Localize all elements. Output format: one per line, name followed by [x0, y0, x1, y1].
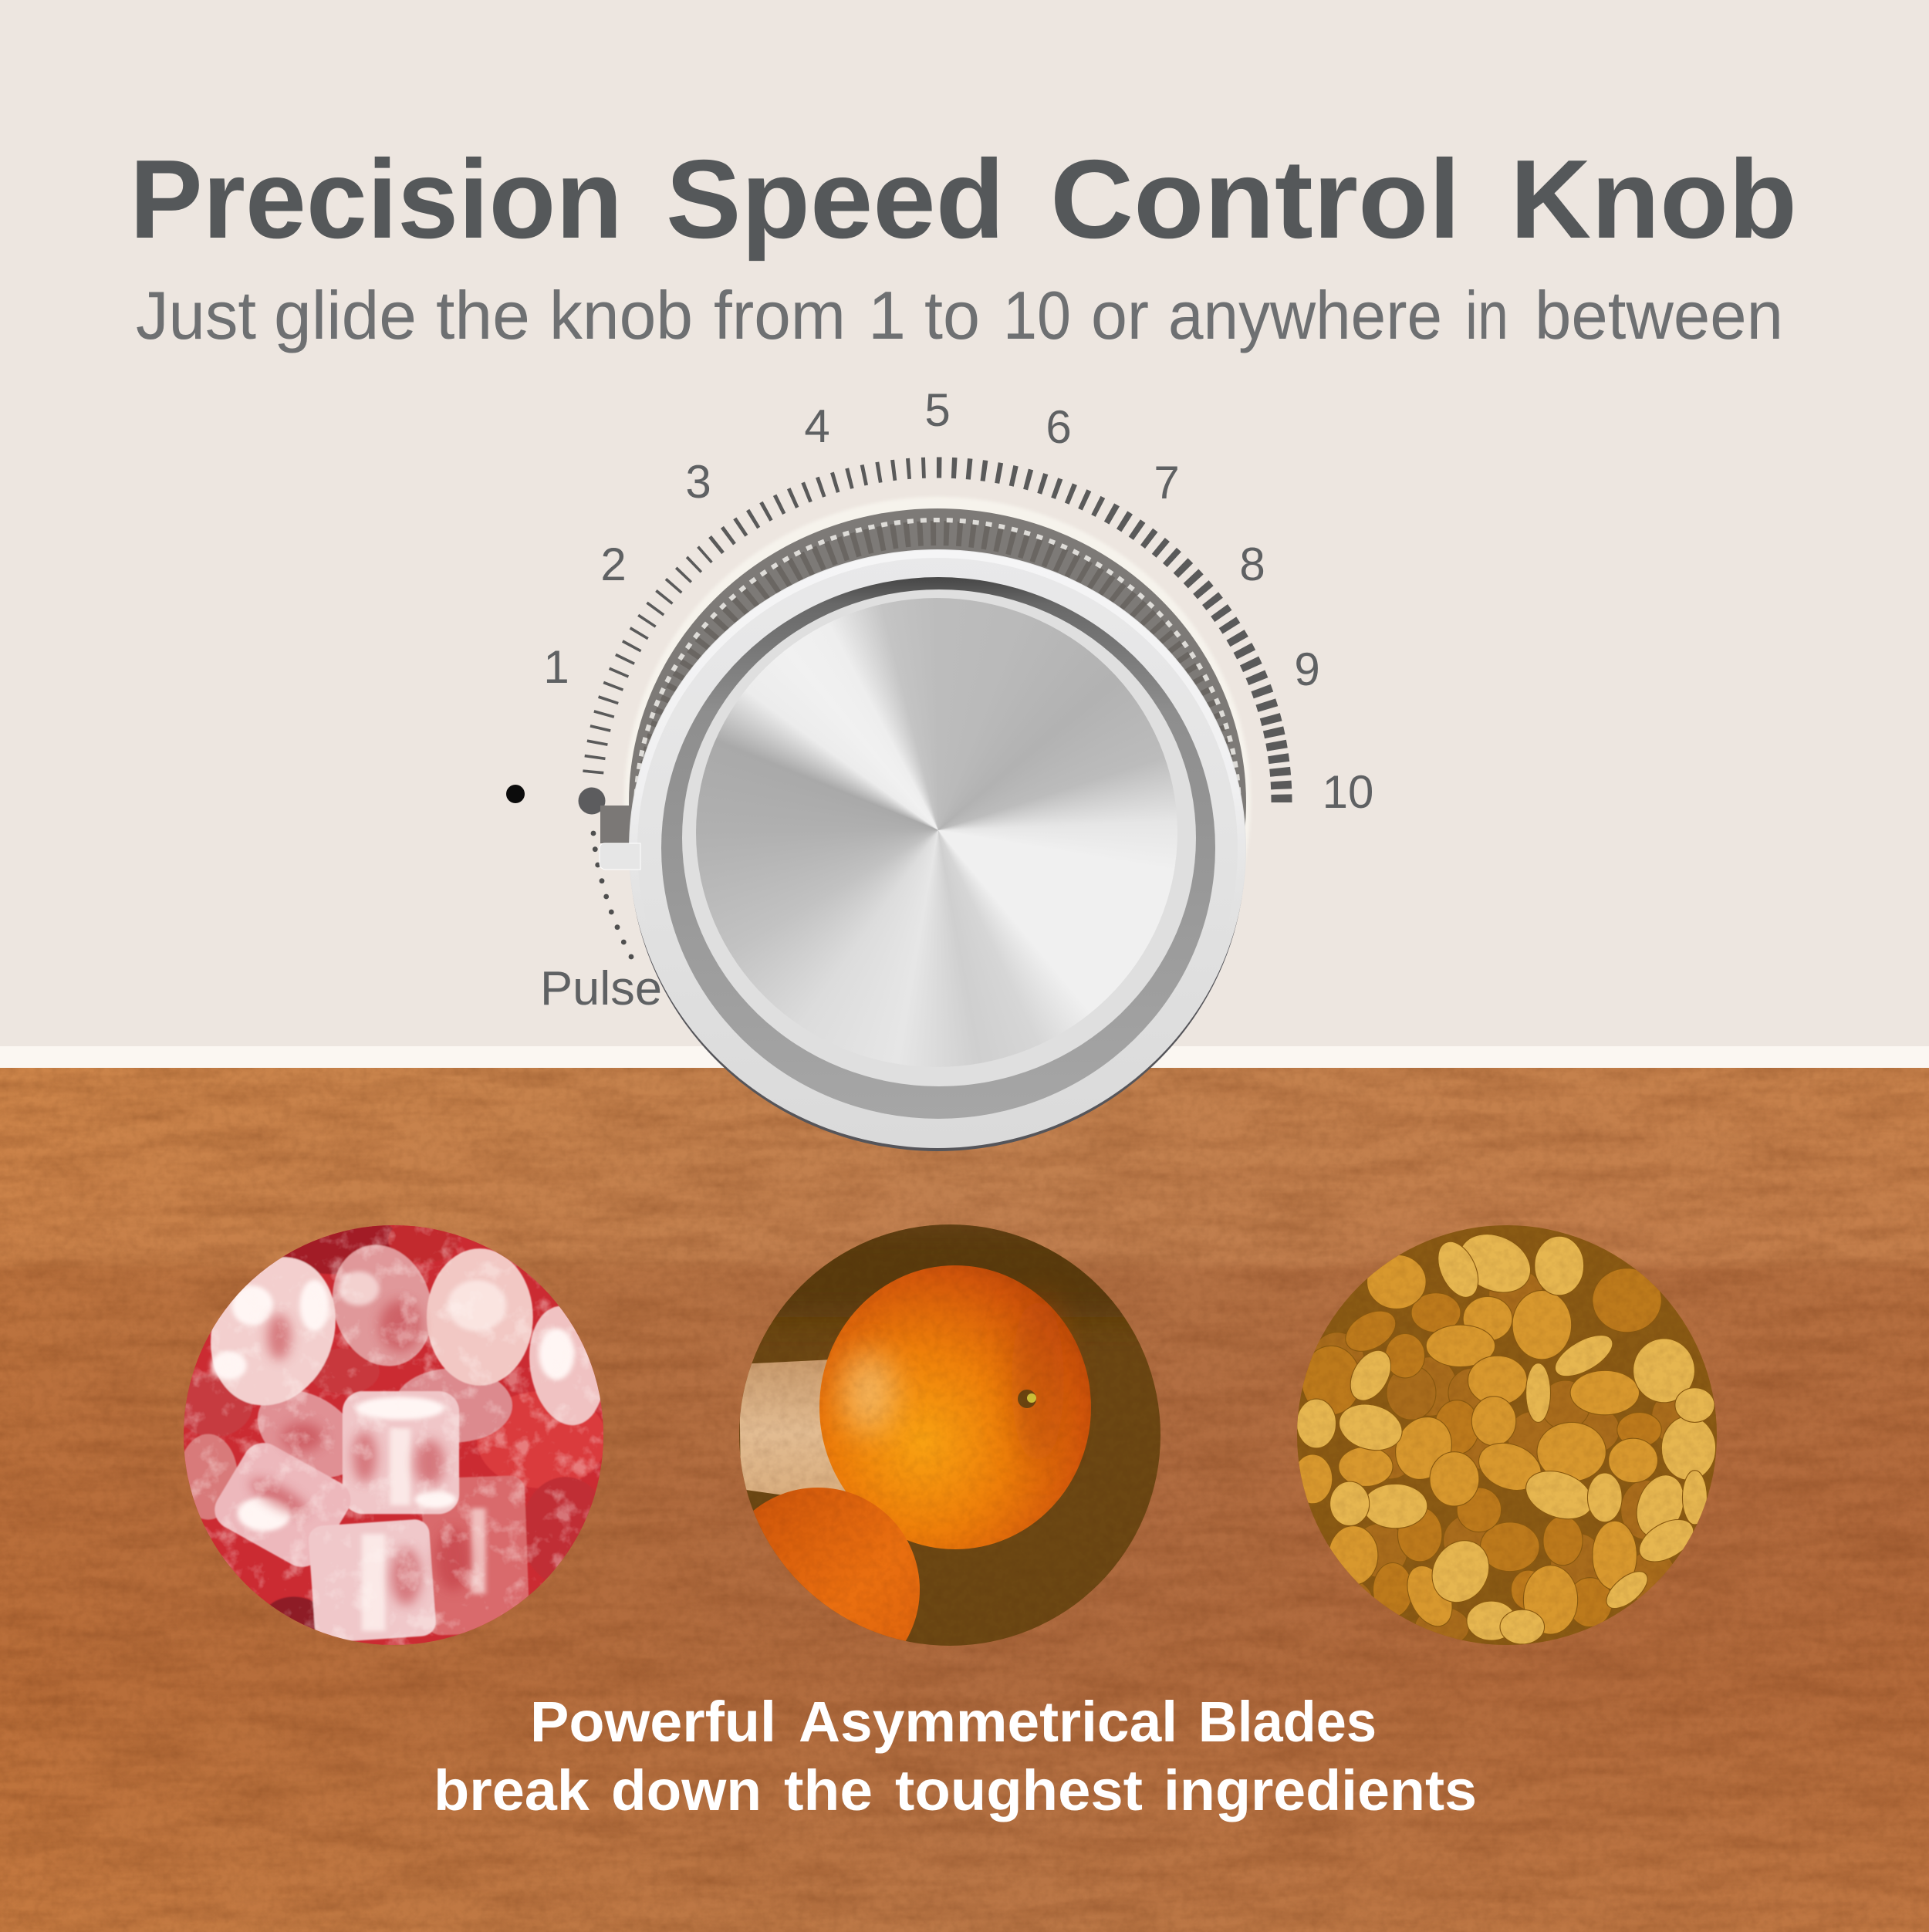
speed dial numbers — [543, 384, 1373, 818]
speed dial numbers: 2 — [600, 539, 627, 590]
rim bottom shadow — [630, 554, 1245, 1151]
pointer tab — [600, 843, 640, 870]
second orange — [753, 1488, 920, 1641]
title: Control — [1050, 137, 1461, 262]
title: Knob — [1510, 137, 1797, 262]
off position black dot — [506, 785, 525, 803]
stem — [1018, 1390, 1036, 1408]
speed dial numbers: 3 — [685, 456, 711, 508]
subtitle — [136, 277, 1783, 353]
speed dial numbers: 6 — [1046, 401, 1072, 453]
caption line 1: Blades — [1198, 1690, 1377, 1754]
large orange — [819, 1265, 1091, 1549]
wood counter surface — [0, 1068, 1929, 1932]
knob outer rim — [629, 549, 1246, 1148]
subtitle: the — [436, 277, 530, 353]
subtitle: to — [924, 277, 980, 353]
title — [130, 137, 1797, 262]
subtitle: glide — [274, 277, 417, 353]
pulse dotted arc — [591, 831, 633, 959]
beige lit patch — [739, 1359, 849, 1505]
speed dial numbers: 4 — [804, 400, 830, 452]
subtitle: Just — [136, 277, 256, 353]
title: Speed — [666, 137, 1005, 262]
speed dial numbers: 7 — [1154, 457, 1180, 508]
subtitle: between — [1535, 277, 1783, 353]
speed dial numbers: 10 — [1323, 766, 1373, 818]
indicator gray dot — [579, 787, 605, 815]
speed dial numbers: 1 — [543, 641, 569, 693]
subtitle: in — [1465, 277, 1508, 353]
knob brushed metal disc — [696, 598, 1177, 1067]
gray rectangle behind tab — [600, 806, 634, 843]
ingredient photo: oranges — [739, 1224, 1160, 1646]
caption line 2 — [434, 1758, 1477, 1822]
inner lip — [682, 589, 1196, 1086]
caption line 1: Powerful — [530, 1690, 776, 1754]
subtitle: 10 — [1003, 277, 1071, 353]
speed dial numbers: 8 — [1239, 539, 1265, 590]
speed dial numbers: 5 — [924, 384, 951, 436]
subtitle: anywhere — [1168, 277, 1442, 353]
background: wall panel — [0, 0, 1929, 1048]
subtitle: 1 — [868, 277, 906, 353]
subtitle: knob — [549, 277, 693, 353]
halo behind knurled band — [624, 497, 1251, 1105]
speed dial numbers: 9 — [1294, 643, 1320, 695]
knurled band — [629, 508, 1246, 1106]
ingredient photo: ice — [176, 1211, 612, 1646]
subtitle: or — [1091, 277, 1149, 353]
caption line 2: down — [611, 1758, 762, 1822]
recessed well — [661, 577, 1215, 1119]
ingredient photo: peanuts — [1293, 1223, 1718, 1647]
white strip above counter — [0, 1046, 1929, 1068]
caption line 1: Asymmetrical — [799, 1690, 1177, 1754]
caption line 2: the — [784, 1758, 873, 1822]
title: Precision — [130, 137, 623, 262]
pulse label: Pulse — [540, 962, 662, 1015]
speed dial tick marks — [593, 468, 1282, 802]
caption line 2: toughest — [895, 1758, 1143, 1822]
knob assembly — [600, 497, 1251, 1151]
caption line 2: ingredients — [1164, 1758, 1477, 1822]
rim outer highlight — [633, 554, 1242, 1143]
caption line 1 — [530, 1690, 1377, 1754]
caption line 2: break — [434, 1758, 590, 1822]
subtitle: from — [714, 277, 846, 353]
